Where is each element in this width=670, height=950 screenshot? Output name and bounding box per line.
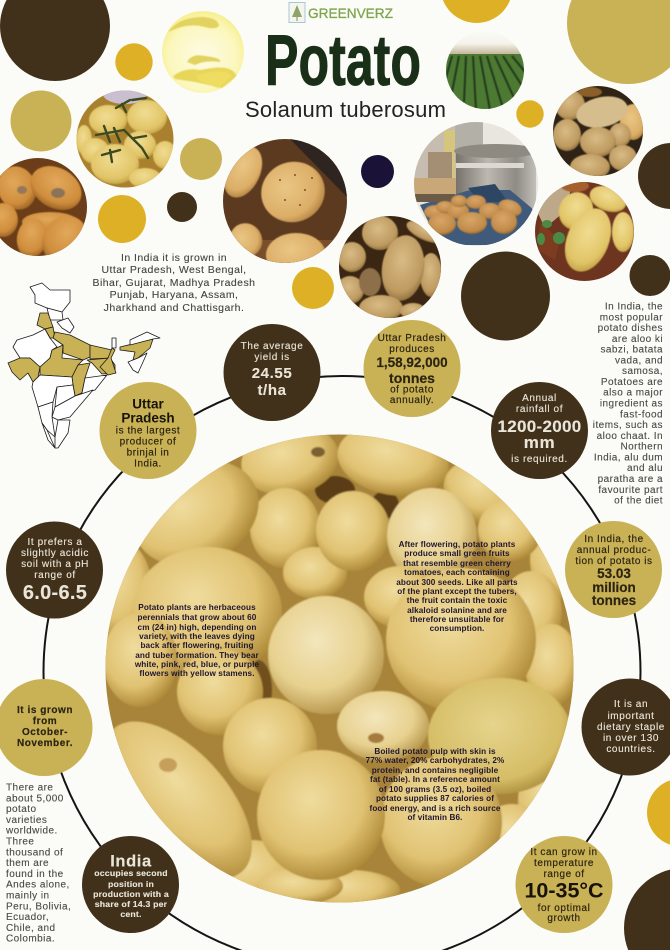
fact: temperature range: growth	[547, 913, 581, 924]
fact: growing season: November.	[17, 738, 73, 749]
photo: potato chips	[162, 11, 244, 93]
fact: annual rainfall	[491, 382, 588, 479]
text on photo: nutrition	[366, 747, 505, 822]
text: popular potato dishes: India, alu dum	[594, 452, 663, 463]
text: popular potato dishes: paratha are a	[598, 474, 663, 485]
fact: largest producer: is the largest	[116, 426, 180, 436]
text on photo: fruits: therefore unsuitable for	[410, 615, 505, 624]
text: popular potato dishes: fast-food	[620, 409, 663, 420]
text on photo: plant description: variety, with the leaves dying	[139, 632, 255, 641]
fact: Uttar Pradesh production	[364, 320, 460, 417]
text: popular potato dishes: items, such as	[593, 420, 663, 431]
text: popular potato dishes: Potatoes are	[601, 377, 663, 388]
fact: India second position: cent.	[120, 909, 142, 919]
fact: annual production of India: tonnes	[592, 593, 636, 608]
text: where grown in India: In India it is grown in	[121, 252, 227, 264]
fact: temperature range	[516, 836, 612, 933]
fact: India second position: India	[110, 852, 152, 870]
text: popular potato dishes: potato dishes	[598, 323, 663, 334]
text on photo: nutrition: Boiled potato pulp with skin is	[374, 747, 496, 756]
text: popular potato dishes: are aloo ki	[612, 334, 663, 345]
text: popular potato dishes: Northern	[620, 442, 663, 453]
text on photo: nutrition: protein, and contains negligible	[372, 766, 499, 775]
text: where grown in India	[93, 252, 255, 314]
photo: boiled potatoes with dill	[76, 90, 174, 188]
fact: annual rainfall: 1200-2000	[498, 417, 582, 436]
fact: average yield: The average	[241, 341, 303, 352]
text on photo: nutrition: 77% water, 20% carbohydrates, 2%	[366, 756, 505, 765]
text on photo: nutrition: food energy, and is a rich source	[370, 804, 501, 813]
text on photo: fruits: alkaloid solanine and are	[407, 606, 507, 615]
fact: dietary staple: important	[607, 711, 655, 722]
fact: temperature range: It can grow in	[530, 847, 598, 858]
text: potato varieties: Chile, and	[6, 923, 56, 934]
fact: soil pH: range of	[34, 570, 76, 581]
fact: annual rainfall: rainfall of	[516, 404, 563, 415]
ring connecting facts	[44, 376, 640, 950]
fact: average yield: t/ha	[257, 382, 287, 399]
text: potato varieties: Andes alone,	[6, 880, 70, 891]
fact: Uttar Pradesh production: of potato	[390, 384, 434, 396]
fact: largest producer: India.	[134, 458, 162, 470]
fact: dietary staple: in over 130	[603, 733, 659, 744]
text: popular potato dishes: aloo chaat. In	[597, 431, 663, 442]
fact: India second position: position in	[108, 879, 154, 889]
fact: Uttar Pradesh production: Uttar Pradesh	[378, 333, 446, 344]
fact: India second position: share of 14.3 per	[95, 899, 168, 909]
fact: soil pH: It prefers a	[28, 537, 82, 548]
text on photo: fruits: that resemble green cherry	[403, 559, 511, 568]
fact: average yield: 24.55	[252, 365, 292, 382]
fact: dietary staple: It is an	[614, 699, 648, 710]
text: potato varieties: thousand of	[6, 847, 63, 858]
text: potato varieties: Three	[6, 836, 34, 848]
fact: Uttar Pradesh production: 1,58,92,000	[376, 355, 448, 370]
fact: dietary staple	[582, 678, 670, 776]
title: Potato	[265, 22, 421, 101]
photo: cooking pot and potatoes	[413, 120, 540, 248]
text: potato varieties: worldwide.	[5, 826, 58, 837]
text: popular potato dishes: sabzi, batata	[600, 345, 663, 356]
text on photo: fruits: the fruit contain the toxic	[407, 596, 508, 605]
fact: average yield: yield is	[254, 352, 290, 363]
text: potato varieties: potato	[6, 804, 37, 815]
text on photo: nutrition: of 100 grams (3.5 oz), boiled	[379, 785, 491, 794]
fact: temperature range: temperature	[534, 858, 594, 869]
fact: growing season: from	[33, 716, 57, 727]
fact: largest producer	[100, 382, 196, 479]
fact: annual rainfall: Annual	[522, 393, 557, 404]
fact: temperature range: for optimal	[538, 903, 590, 914]
text: potato varieties: varieties	[6, 815, 47, 826]
fact: largest producer: producer of	[120, 436, 176, 448]
text: potato varieties: Colombia.	[6, 934, 55, 945]
text: potato varieties	[5, 782, 71, 945]
fact: largest producer: Uttar	[132, 396, 164, 412]
text: popular potato dishes: samosa,	[622, 366, 663, 377]
text on photo: fruits: about 300 seeds. Like all parts	[396, 578, 518, 587]
photo: potatoes on wooden board	[223, 139, 347, 263]
fact: dietary staple: dietary staple	[597, 722, 665, 733]
fact: annual production of India: In India, the	[584, 534, 644, 545]
text: potato varieties: Peru, Bolivia,	[6, 901, 71, 912]
text: where grown in India: Uttar Pradesh, West Bengal,	[101, 264, 247, 276]
fact: annual production of India	[565, 521, 662, 618]
text on photo: nutrition: of vitamin B6.	[407, 813, 463, 822]
fact: growing season: It is grown	[17, 705, 73, 716]
text: potato varieties: them are	[6, 858, 49, 869]
fact: India second position: occupies second	[94, 868, 168, 878]
photo: potato field	[446, 39, 524, 109]
text on photo: plant description	[134, 603, 259, 678]
fact: Uttar Pradesh production: annually.	[390, 395, 434, 406]
fact: India second position	[82, 836, 179, 933]
photo: orange potatoes	[0, 158, 87, 256]
text: popular potato dishes: and alu	[627, 463, 663, 474]
text on photo: fruits	[396, 540, 518, 633]
text: popular potato dishes: In India, the	[605, 302, 663, 312]
text: potato varieties: Ecuador,	[6, 912, 49, 923]
fact: average yield	[224, 324, 320, 421]
fact: largest producer: Pradesh	[121, 410, 175, 426]
text: potato varieties: There are	[6, 782, 53, 794]
map of India with growing states	[8, 283, 160, 448]
text on photo: plant description: cm (24 in) high, depending on	[138, 623, 256, 632]
text on photo: plant description: Potato plants are herbaceous	[138, 603, 256, 612]
text on photo: fruits: consumption.	[430, 624, 484, 633]
photo: potatoes close up	[339, 216, 441, 318]
logo: Greenverz	[289, 2, 393, 22]
fact: Uttar Pradesh production: tonnes	[389, 370, 435, 386]
text on photo: plant description: and tuber formation. They bear	[135, 651, 259, 660]
text on photo: nutrition: fat (table). In a reference amount	[370, 775, 500, 784]
text on photo: plant description: back after flowering, fruiting	[140, 641, 254, 650]
subtitle: Solanum tuberosum	[245, 97, 446, 122]
logo: Greenverz: GREENVERZ	[308, 5, 393, 21]
fact: soil pH: soil with a pH	[21, 559, 89, 570]
fact: growing season	[0, 679, 92, 776]
fact: temperature range: range of	[543, 869, 585, 880]
fact: annual production of India: million	[592, 580, 636, 595]
photo: potatoes on soil	[534, 180, 636, 283]
fact: annual rainfall: is required.	[511, 454, 568, 465]
text: potato varieties: found in the	[6, 869, 64, 880]
fact: annual production of India: 53.03	[597, 566, 631, 581]
fact: temperature range: 10-35°C	[524, 878, 604, 902]
text: popular potato dishes: most popular	[600, 312, 663, 323]
fact: soil pH: 6.0-6.5	[23, 582, 87, 604]
text: popular potato dishes: favourite part	[598, 485, 663, 496]
fact: soil pH: slightly acidic	[21, 548, 89, 559]
text on photo: plant description: perennials that grow about 60	[138, 613, 257, 622]
fact: annual production of India: annual produc-	[577, 545, 651, 556]
text on photo: plant description: white, pink, red, blue, or purple	[134, 660, 259, 669]
text on photo: fruits: of the plant except the tubers,	[397, 587, 517, 596]
text: popular potato dishes: ingredient as	[600, 398, 663, 410]
fact: annual rainfall: mm	[524, 433, 555, 452]
text on photo: fruits: tomatoes, each containing	[404, 568, 510, 577]
text: popular potato dishes: of the diet	[614, 496, 663, 506]
text: where grown in India: Bihar, Gujarat, Madhya Pradesh	[93, 277, 255, 289]
text: potato varieties: mainly in	[6, 890, 50, 902]
fact: Uttar Pradesh production: produces	[389, 344, 435, 355]
fact: growing season: October-	[22, 727, 68, 738]
fact: annual production of India: tion of potato is	[575, 556, 653, 567]
text: where grown in India: Jharkhand and Chattisgarh.	[104, 302, 244, 314]
text on photo: fruits: After flowering, potato plants	[399, 540, 516, 549]
text: where grown in India: Punjab, Haryana, Assam,	[110, 289, 238, 301]
text on photo: nutrition: potato supplies 87 calories of	[376, 794, 494, 803]
main photo: pile of potatoes	[106, 434, 574, 902]
fact: India second position: production with a	[93, 889, 169, 899]
photo: top right potatoes	[552, 86, 646, 180]
text on photo: fruits: produce small green fruits	[404, 549, 510, 558]
fact: soil pH	[6, 522, 103, 618]
fact: dietary staple: countries.	[606, 744, 656, 755]
text: popular potato dishes: vada, and	[615, 355, 663, 366]
text on photo: plant description: flowers with yellow stamens.	[139, 669, 255, 678]
fact: largest producer: brinjal in	[127, 448, 169, 458]
text: potato varieties: about 5,000	[6, 793, 64, 804]
text: popular potato dishes	[593, 302, 663, 506]
text: popular potato dishes: also a major	[603, 388, 663, 399]
